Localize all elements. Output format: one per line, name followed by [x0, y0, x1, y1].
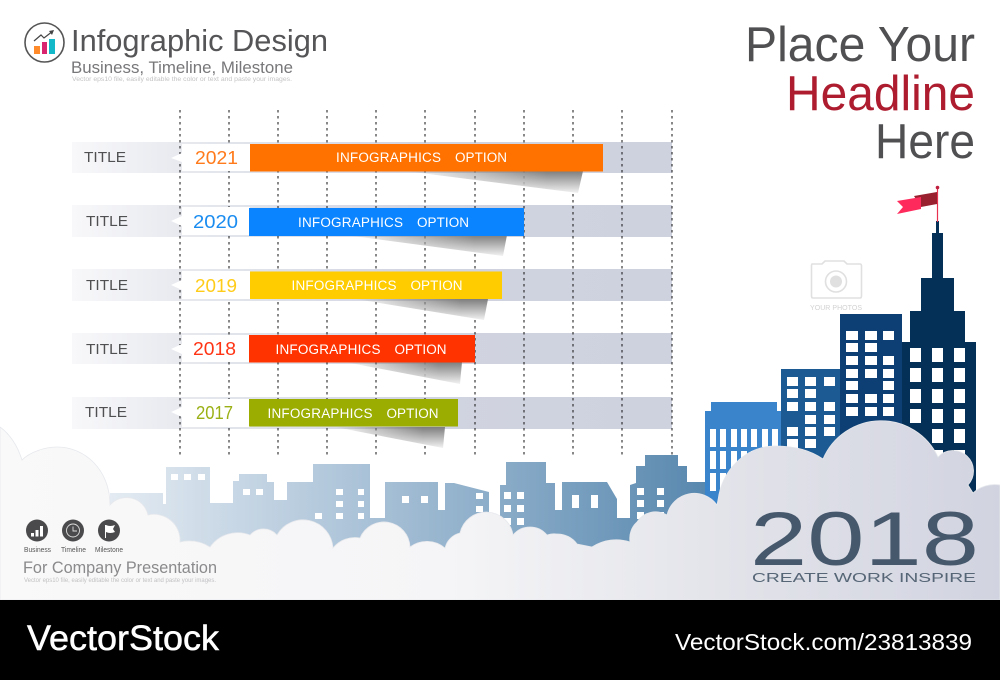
row shadows [335, 171, 583, 448]
bar label 2018: OPTION [394, 342, 446, 357]
building: navy [840, 314, 902, 444]
year 2019: 2019 [195, 276, 237, 296]
icon: camera placeholder [810, 261, 862, 312]
small caption: Vector eps10 file, easily editable the color or text and paste your images. [72, 76, 292, 83]
title 2021: TITLE [84, 149, 126, 166]
timeline row 2021 [84, 144, 603, 172]
footer watermark band [0, 600, 1000, 680]
label: timeline: Timeline [61, 547, 86, 554]
title 2019: TITLE [86, 277, 128, 294]
title 2018: TITLE [86, 341, 128, 358]
timeline row 2019 [86, 272, 502, 299]
skyline: foreground towers [705, 186, 976, 510]
text: for company presentation: For Company Presentation [23, 559, 217, 577]
bar label 2017: INFOGRAPHICS [268, 406, 372, 421]
timeline row 2018 [86, 335, 475, 362]
year badge 2018 [750, 497, 979, 585]
headline [745, 18, 975, 169]
building: light blue [705, 402, 783, 510]
icon: growth chart logo [25, 23, 64, 62]
image id url: VectorStock.com/23813839 [675, 629, 972, 655]
bar label 2020: INFOGRAPHICS [298, 215, 403, 230]
bar label 2018: INFOGRAPHICS [276, 342, 380, 357]
bar 2019 [250, 272, 502, 299]
bar label 2017: OPTION [386, 406, 438, 421]
year label boxes [171, 144, 250, 427]
icon: flag on tower [897, 186, 939, 222]
building: tallest tower [902, 221, 976, 500]
year 2021: 2021 [195, 148, 238, 168]
big year: 2018 [750, 497, 979, 582]
bar 2020 [249, 208, 524, 236]
slogan: CREATE WORK INSPIRE [752, 570, 976, 585]
brand logo text: VectorStock [27, 619, 220, 658]
year 2020: 2020 [193, 212, 238, 232]
bar label 2019: OPTION [410, 278, 462, 293]
bar label 2021: INFOGRAPHICS [336, 150, 441, 165]
bar label 2021: OPTION [455, 150, 507, 165]
bar label 2020: OPTION [417, 215, 469, 230]
footer-left: company presentation text [23, 559, 217, 584]
title 2020: TITLE [86, 213, 128, 230]
header: infographic design [25, 23, 328, 83]
label: business: Business [24, 547, 51, 554]
timeline row 2020 [86, 208, 524, 236]
building: medium blue [781, 369, 843, 489]
timeline row 2017 [85, 399, 458, 426]
dashed time grid [180, 110, 672, 458]
bar 2021 [250, 144, 603, 172]
camera caption: YOUR PHOTOS [810, 305, 862, 312]
bar 2018 [249, 335, 475, 362]
headline line 2: Headline [786, 67, 975, 121]
heading: infographic design: Infographic Design [71, 23, 328, 58]
row background tracks [72, 142, 672, 429]
title 2017: TITLE [85, 404, 127, 421]
label: milestone: Milestone [95, 547, 123, 554]
clouds foreground [0, 421, 1000, 600]
footer-left: category icons [24, 520, 123, 554]
year 2017: 2017 [196, 403, 233, 423]
headline line 3: Here [875, 115, 975, 169]
bar label 2019: INFOGRAPHICS [292, 278, 396, 293]
year 2018: 2018 [193, 339, 236, 359]
headline line 1: Place Your [745, 18, 975, 72]
subheading: Business, Timeline, Milestone [71, 59, 293, 77]
small caption: Vector eps10 file, easily editable the color or text and paste your images. [24, 577, 216, 584]
bar 2017 [249, 399, 458, 426]
skyline: background pale buildings [110, 455, 712, 560]
